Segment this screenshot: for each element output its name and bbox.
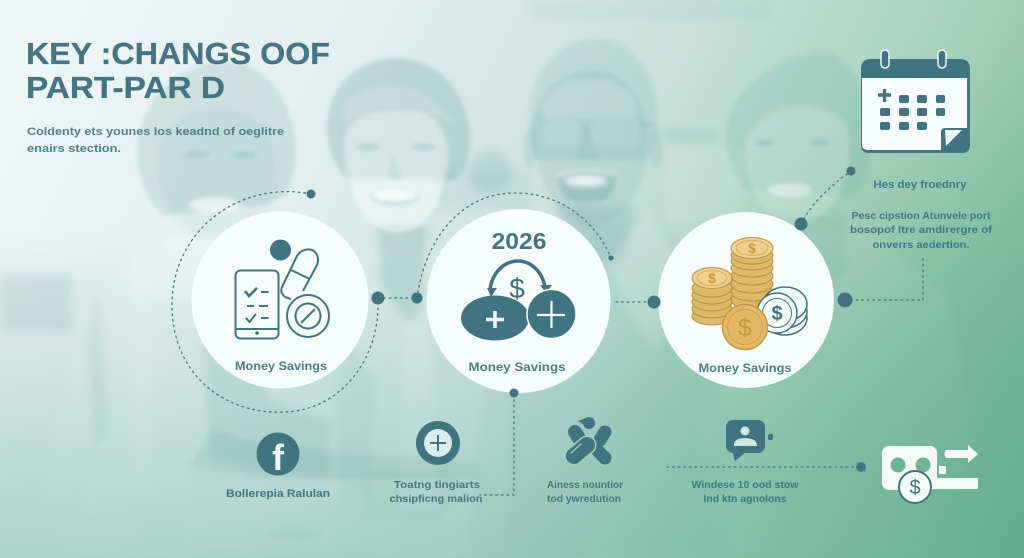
- tablet hands and papers: [20, 430, 480, 558]
- panel: 2026 circle: [426, 209, 610, 393]
- icon: phone checklist and pills: [236, 240, 329, 338]
- person 2: [327, 58, 510, 558]
- bottom caption 2: Toatng tingiarts: [394, 479, 480, 491]
- connector dots: [306, 166, 866, 472]
- bottom item: pills icon: [571, 417, 605, 458]
- icon: coin stacks: $: [708, 270, 716, 286]
- icon: dollar swap with plus circles: $: [509, 273, 525, 304]
- bottom caption 2: [390, 479, 482, 505]
- year: 2026: [492, 228, 546, 254]
- title: [26, 36, 330, 105]
- panel: coins circle: [658, 212, 834, 388]
- room tones: [0, 0, 770, 331]
- calendar heading: Hes dey froednry: [874, 179, 967, 191]
- icon: money transfer: $: [909, 477, 921, 499]
- icon: dollar swap with plus circles: [461, 261, 576, 340]
- bottom caption 3: tod ywredution: [547, 493, 621, 505]
- person 3: [470, 38, 730, 558]
- bottom caption 3: [547, 479, 623, 505]
- title: PART-PAR D: [26, 70, 225, 105]
- label: Money Savings: [698, 361, 792, 375]
- bottom caption 4: [692, 479, 799, 505]
- person 4: [700, 52, 975, 558]
- intro text: enairs stection.: [27, 143, 121, 155]
- person 1: [45, 62, 336, 558]
- dotted connector rings and lines: [172, 171, 923, 495]
- icon: money transfer: [882, 445, 978, 503]
- bottom caption 3: Ainess nountior: [547, 479, 623, 491]
- bottom caption 2: chsipficng malion: [390, 493, 482, 505]
- bottom item: profile chat icon: [726, 420, 773, 461]
- prescription text: bosopof ltre amdirergre of: [850, 224, 993, 236]
- intro text: [27, 126, 284, 155]
- bottom caption 1: Bollerepia Ralulan: [226, 488, 330, 500]
- prescription text: Pesc cipstion Atunvele port: [852, 210, 991, 222]
- icon: coin stacks: $: [738, 314, 752, 342]
- bottom item: Facebook style icon: [256, 432, 300, 478]
- label: Money Savings: [468, 360, 566, 374]
- prescription text: [850, 210, 993, 251]
- title: KEY :CHANGS OOF: [26, 36, 330, 71]
- intro text: Coldenty ets younes los keadnd of oeglitre: [27, 126, 284, 138]
- icon: coin stacks: [692, 238, 807, 350]
- bottom item: Facebook style icon: f: [272, 437, 285, 478]
- bottom caption 4: Windese 10 ood stow: [692, 479, 799, 491]
- panel: medication circle: [192, 212, 368, 388]
- bottom item: plus icon: [416, 421, 460, 465]
- icon: calendar: [861, 50, 970, 153]
- label: Money Savings: [235, 359, 327, 373]
- bottom caption 4: lnd ktn agnolons: [704, 493, 787, 505]
- icon: coin stacks: $: [748, 240, 756, 256]
- prescription text: onverrs aedertion.: [872, 239, 970, 251]
- icon: coin stacks: $: [771, 303, 783, 325]
